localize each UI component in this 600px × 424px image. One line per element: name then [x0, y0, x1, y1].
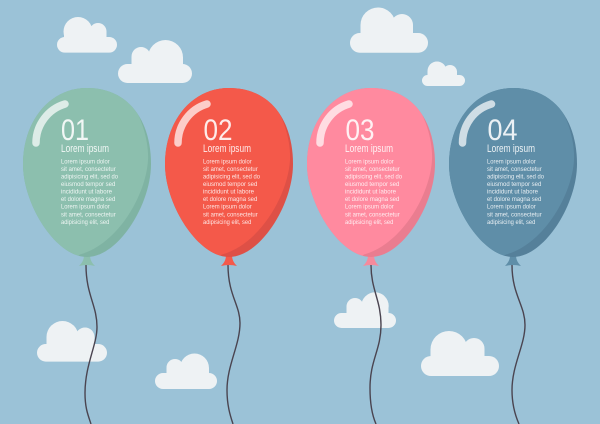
- number 4: 04: [488, 114, 518, 147]
- balloon 1: [23, 88, 151, 424]
- body text 1: adipisicing elit, sed: [61, 219, 110, 226]
- string 4: [512, 265, 525, 424]
- body text 3: sit amet, consectetur: [345, 211, 400, 218]
- number 3: 03: [346, 114, 374, 147]
- body text 2: et dolore magna sed: [203, 196, 258, 203]
- body text 4: eiusmod tempor sed: [487, 181, 542, 188]
- highlight 4: [462, 104, 492, 143]
- cloud: top left: [57, 17, 117, 53]
- highlight 3: [320, 104, 349, 143]
- body text 1: sit amet, consectetur: [61, 211, 116, 218]
- body text 4: adipisicing elit, sed do: [487, 173, 544, 180]
- balloon face 4: [449, 88, 574, 256]
- body text 3: adipisicing elit, sed: [345, 219, 394, 226]
- cloud: bottom centre left: [155, 354, 217, 389]
- highlight 2: [178, 104, 207, 143]
- balloon 2: [165, 88, 293, 424]
- number 1: 01: [61, 114, 89, 147]
- body text 3: Lorem ipsum dolor: [345, 158, 394, 165]
- body text 1: incididunt ut labore: [61, 188, 112, 195]
- body text 4: et dolore magna sed: [487, 196, 542, 203]
- string 1: [85, 265, 97, 424]
- cloud: top left second: [118, 40, 192, 83]
- body text 4: incididunt ut labore: [487, 188, 538, 195]
- highlight 1: [36, 104, 65, 143]
- heading 2: Lorem ipsum: [203, 143, 251, 155]
- body text 2: eiusmod tempor sed: [203, 181, 258, 188]
- body text 2: sit amet, consectetur: [203, 166, 258, 173]
- body text 4: Lorem ipsum dolor: [487, 158, 536, 165]
- body text 1: et dolore magna sed: [61, 196, 116, 203]
- body text 2: incididunt ut labore: [203, 188, 254, 195]
- body text 1: Lorem ipsum dolor: [61, 158, 110, 165]
- string 2: [227, 265, 240, 424]
- cloud: bottom right: [421, 331, 499, 376]
- heading 4: Lorem ipsum: [487, 143, 535, 155]
- knot 2: [221, 255, 237, 266]
- body text 4: sit amet, consectetur: [487, 166, 542, 173]
- body text 3: [345, 158, 402, 226]
- cloud: bottom left: [37, 321, 107, 362]
- body text 3: adipisicing elit, sed do: [345, 173, 402, 180]
- body text 2: sit amet, consectetur: [203, 211, 258, 218]
- knot 1: [79, 255, 95, 266]
- body text 4: Lorem ipsum dolor: [487, 204, 536, 211]
- body text 3: eiusmod tempor sed: [345, 181, 400, 188]
- balloon face 1: [23, 88, 148, 256]
- balloon body 4: [449, 88, 577, 257]
- body text 1: eiusmod tempor sed: [61, 181, 116, 188]
- string 3: [370, 265, 381, 424]
- body text 1: Lorem ipsum dolor: [61, 204, 110, 211]
- body text 1: sit amet, consectetur: [61, 166, 116, 173]
- body text 3: sit amet, consectetur: [345, 166, 400, 173]
- body text 2: Lorem ipsum dolor: [203, 204, 252, 211]
- body text 2: Lorem ipsum dolor: [203, 158, 252, 165]
- heading 1: Lorem ipsum: [61, 143, 109, 155]
- body text 2: [203, 158, 260, 226]
- balloon 3: [307, 88, 435, 424]
- body text 2: adipisicing elit, sed: [203, 219, 252, 226]
- body text 4: adipisicing elit, sed: [487, 219, 536, 226]
- balloon body 3: [307, 88, 435, 257]
- balloon 4: [449, 88, 577, 424]
- body text 3: incididunt ut labore: [345, 188, 396, 195]
- body text 1: [61, 158, 118, 226]
- body text 4: [487, 158, 544, 226]
- body text 3: Lorem ipsum dolor: [345, 204, 394, 211]
- cloud: small top right: [422, 62, 465, 86]
- cloud: top centre right: [350, 8, 428, 53]
- balloon body 1: [23, 88, 151, 257]
- body text 4: sit amet, consectetur: [487, 211, 542, 218]
- knot 4: [505, 255, 521, 266]
- body text 3: et dolore magna sed: [345, 196, 400, 203]
- cloud: bottom centre: [334, 292, 396, 328]
- balloon face 2: [165, 88, 290, 256]
- number 2: 02: [204, 114, 232, 147]
- balloon body 2: [165, 88, 293, 257]
- body text 2: adipisicing elit, sed do: [203, 173, 260, 180]
- balloon face 3: [307, 88, 432, 256]
- heading 3: Lorem ipsum: [345, 143, 393, 155]
- body text 1: adipisicing elit, sed do: [61, 173, 118, 180]
- knot 3: [363, 255, 379, 266]
